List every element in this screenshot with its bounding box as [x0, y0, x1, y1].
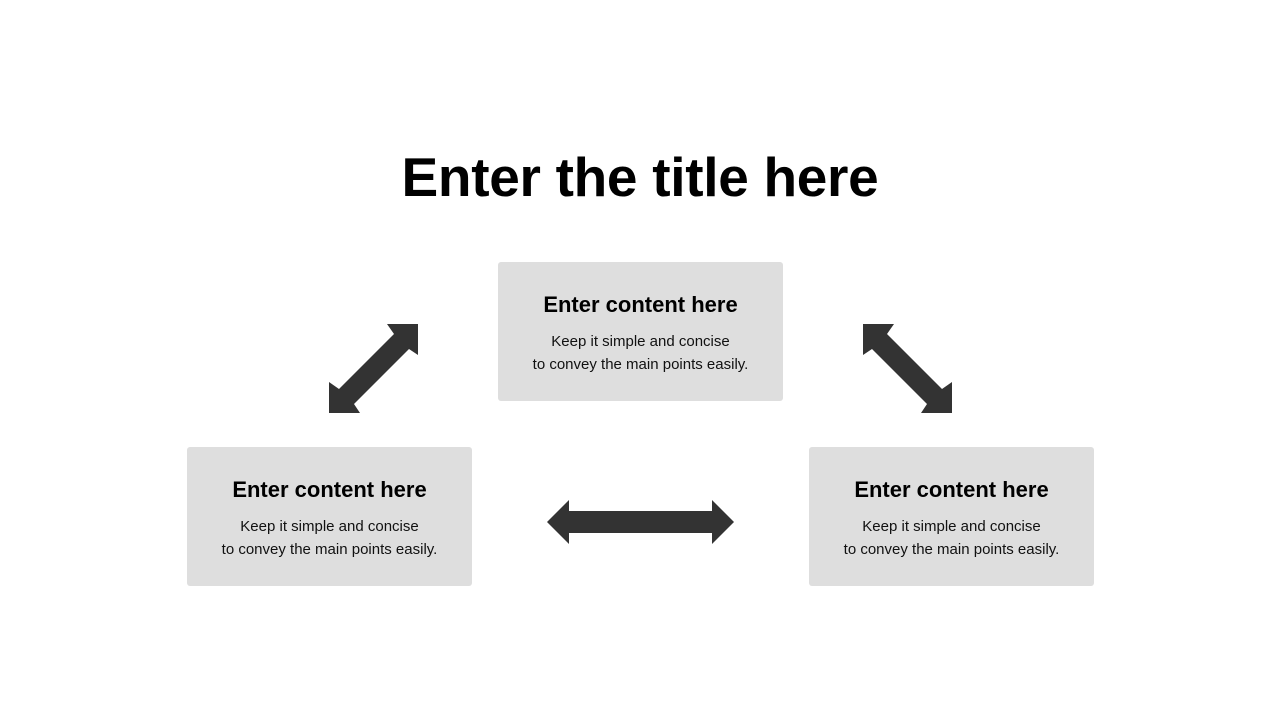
- panel text: top: Keep it simple and concise: [551, 333, 730, 350]
- panel: bottom left: [187, 447, 472, 586]
- arrow: left diagonal: [329, 324, 418, 413]
- panel text: top: [532, 333, 748, 373]
- panel text: bottom left: [222, 518, 437, 558]
- panel text: bottom right: [844, 518, 1059, 558]
- panel: bottom right: [809, 447, 1094, 586]
- panel text: bottom left: to convey the main points easily.: [222, 541, 437, 558]
- panel text: bottom left: Keep it simple and concise: [240, 518, 419, 535]
- panel text: top: to convey the main points easily.: [533, 356, 748, 373]
- panel heading: top: Enter content here: [543, 292, 738, 317]
- panel heading: bottom left: Enter content here: [232, 477, 427, 502]
- panel heading: bottom right: Enter content here: [854, 477, 1049, 502]
- panel text: bottom right: Keep it simple and concise: [862, 518, 1041, 535]
- panel: top: [498, 262, 783, 401]
- arrow: horizontal: [547, 500, 734, 544]
- panel text: bottom right: to convey the main points easily.: [844, 541, 1059, 558]
- title: Enter the title here: [402, 146, 878, 208]
- arrow: right diagonal: [863, 324, 952, 413]
